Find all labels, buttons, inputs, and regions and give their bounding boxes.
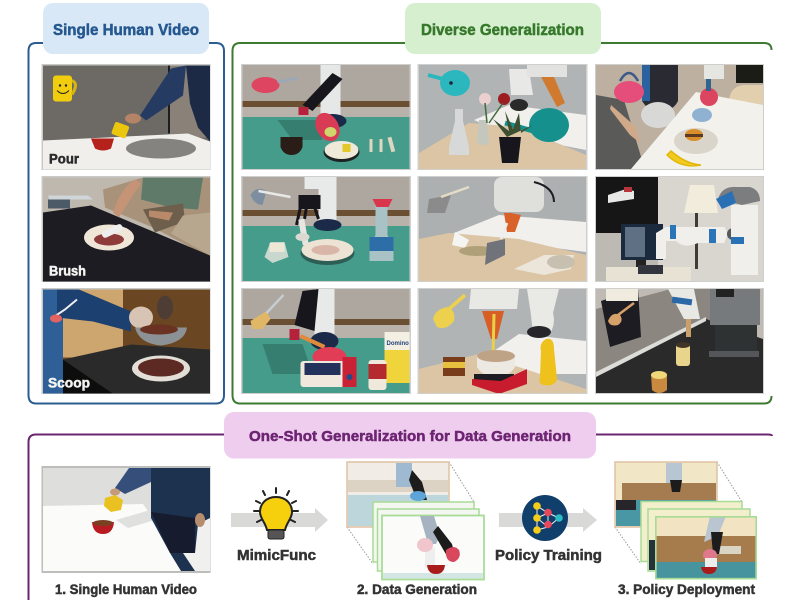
label: single human video step: 1. Single Human Video: [55, 582, 197, 597]
photo: brush: Brush: [49, 264, 86, 278]
heading: diverse generalization: Diverse Generalization: [421, 22, 584, 39]
photo: robot with kettle: [595, 64, 764, 170]
panel: diverse generalization: [232, 3, 772, 404]
heading: one-shot generalization: [224, 412, 596, 458]
photo: robot sweeping: [418, 176, 588, 282]
photo: pour: Pour: [49, 152, 80, 166]
heading: single human video: [43, 3, 209, 54]
photo: robot brushing plate: [241, 176, 411, 282]
photo: robot pouring with pan: [241, 64, 411, 170]
photo: brush: [42, 176, 210, 282]
photo: single human video step: [42, 466, 210, 573]
photo: robot with spatula and stove: [241, 288, 411, 394]
icon: light bulb: [254, 488, 298, 539]
image stack: data generation: [347, 462, 484, 580]
arrow: policy training: [499, 495, 597, 541]
panel: one-shot generalization for data generation: [28, 412, 772, 600]
panel: single human video: [28, 3, 224, 404]
arrow: mimicfunc: [231, 488, 328, 539]
photo: scoop: Scoop: [48, 376, 90, 390]
photo: watering can: [418, 64, 588, 170]
label: mimicfunc: MimicFunc: [237, 548, 316, 564]
label: policy deployment: 3. Policy Deployment: [618, 582, 756, 597]
photo: scoop: [42, 288, 210, 394]
label: policy training: Policy Training: [495, 548, 602, 564]
photo: dual arm robot with monitor: [595, 176, 764, 282]
photo: pour: [42, 64, 210, 170]
heading: one-shot generalization: One-Shot Generalization for Data Generation: [249, 428, 571, 445]
heading: diverse generalization: [405, 3, 601, 54]
label: data generation: 2. Data Generation: [357, 582, 477, 597]
photo: robot with spoon and coffee machine: [595, 288, 764, 394]
heading: single human video: Single Human Video: [53, 22, 199, 39]
photo: robot with spatula and stove: Domino: [386, 341, 409, 347]
frame: front deployment frame: [655, 516, 757, 580]
icon: neural network: [522, 495, 568, 541]
image stack: policy deployment: [615, 462, 757, 580]
photo: robot with spoon and pot: [418, 288, 588, 394]
